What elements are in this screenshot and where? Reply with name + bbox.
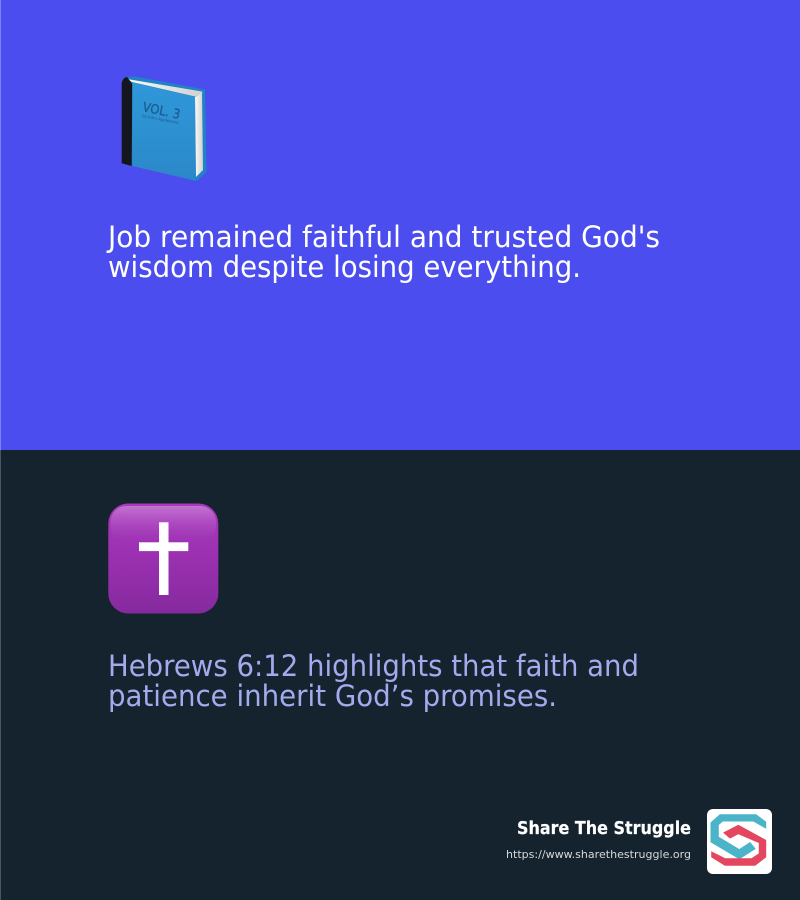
text: job statement: Job remained faithful and trusted God's [106,220,660,254]
footer brand [506,809,772,874]
icon: blue book [122,76,206,181]
icon: logo [707,809,772,874]
brand url: https://www.sharethestruggle.org [506,849,691,861]
text: hebrews statement: patience inherit God’s promises. [108,679,557,713]
text: job statement: wisdom despite losing everything. [108,250,581,284]
icon: blue book: VOL. 3 [141,100,181,123]
panel: top [0,0,800,450]
text: job statement [106,220,660,284]
icon: blue book: by John Appleseed [142,113,180,125]
brand name: Share The Struggle [517,819,691,839]
text: hebrews statement [108,649,639,713]
panel: bottom [0,450,800,900]
text: hebrews statement: Hebrews 6:12 highlights that faith and [108,649,639,683]
icon: latin cross [108,504,218,614]
